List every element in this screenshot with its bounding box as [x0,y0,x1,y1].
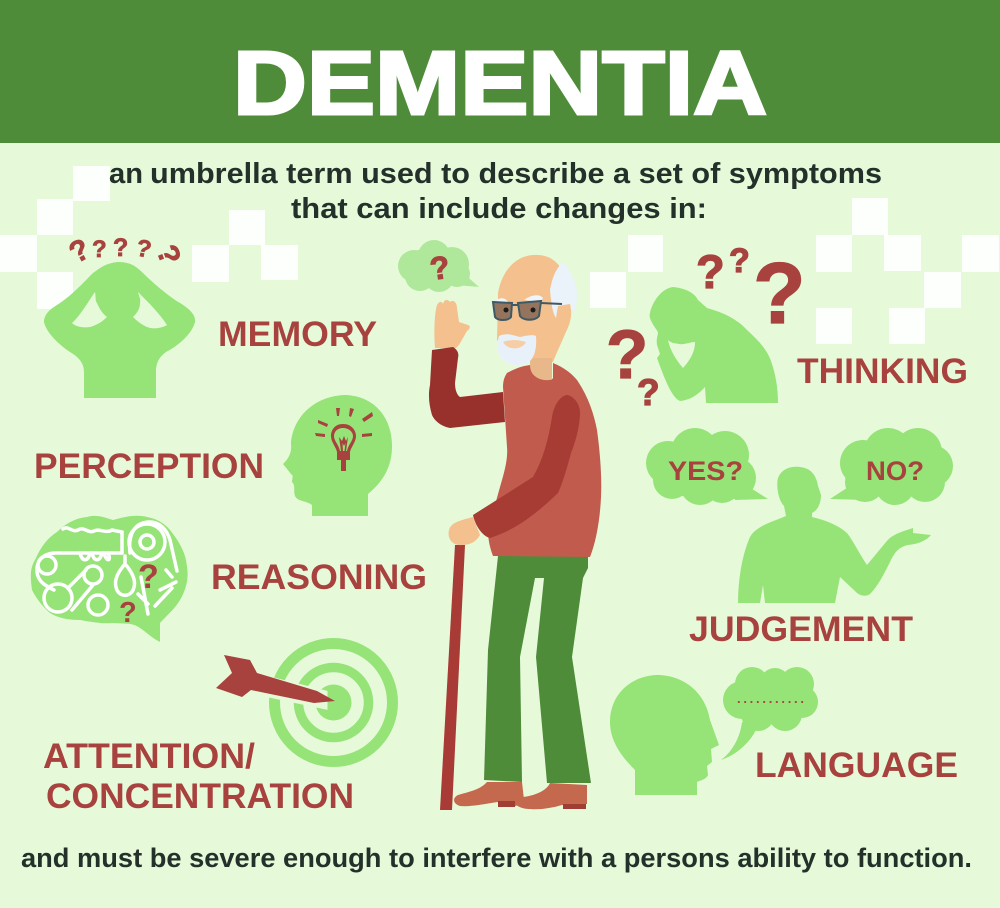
label: reasoning: REASONING [211,558,427,597]
icon: judgement figure with yes / no bubbles: NO? [866,456,924,486]
intro text: an [109,158,143,190]
front arm [473,395,580,538]
label: attention / concentration: CONCENTRATION [46,777,354,816]
question marks: ? [606,316,648,393]
icon: memory figure holding head: ? [134,234,154,264]
trousers [484,556,591,783]
label: attention / concentration: ATTENTION/ [43,737,255,776]
question marks [606,242,806,413]
label: attention / concentration [43,737,354,816]
neck and head [497,255,571,368]
left shoe [454,782,524,806]
eyebrows [494,295,543,302]
closing text: and must be severe enough to interfere with a persons ability to function. [21,843,972,873]
icon: language head with speech bubble [610,667,818,795]
icon: memory figure holding head: ? [113,234,128,262]
icon: memory figure holding head: ? [64,232,95,270]
icon: head with light bulb [283,395,392,516]
label: memory: MEMORY [218,315,377,354]
white hair [550,262,577,318]
icon: small question thought bubble [398,240,479,292]
label: perception: PERCEPTION [34,447,264,486]
cane [440,545,465,810]
question marks: ? [696,245,725,298]
icon: judgement figure with yes / no bubbles [646,428,953,603]
icon: target with dart [216,644,392,762]
fist [449,517,480,545]
icon: brain with machinery [31,516,188,642]
bubble: no [830,428,953,505]
icon: small question thought bubble: ? [428,249,452,287]
person silhouette [738,467,931,603]
icon: thinking figure [606,242,806,413]
icon: memory figure holding head: ? [92,236,107,263]
icon: memory figure holding head [44,232,195,398]
question marks: ? [637,372,660,413]
intro text: umbrella term used to describe a set of symptoms [150,158,882,190]
icon: language head with speech bubble: ........... [737,691,804,706]
question marks: ? [729,242,750,280]
label: thinking: THINKING [797,352,968,391]
icon: brain with machinery: ? [138,558,159,596]
icon: memory figure holding head: ? [150,240,187,270]
icon: judgement figure with yes / no bubbles: YES? [668,456,743,486]
beard [498,334,536,365]
label: language: LANGUAGE [755,746,958,785]
raised arm [429,347,505,428]
raised hand [434,300,470,348]
intro text [109,158,882,225]
right shoe [515,783,587,809]
label: judgement: JUDGEMENT [689,610,913,649]
illustration: elderly man with cane [429,255,601,810]
title: DEMENTIA [233,34,767,134]
header banner [0,0,1000,143]
shoe heels [498,801,586,809]
bubble: yes [646,428,768,505]
icon: brain with machinery: ? [119,597,137,629]
question marks: ? [753,246,806,342]
sweater [488,363,601,557]
glasses [493,301,562,320]
intro text: that can include changes in: [291,193,707,225]
